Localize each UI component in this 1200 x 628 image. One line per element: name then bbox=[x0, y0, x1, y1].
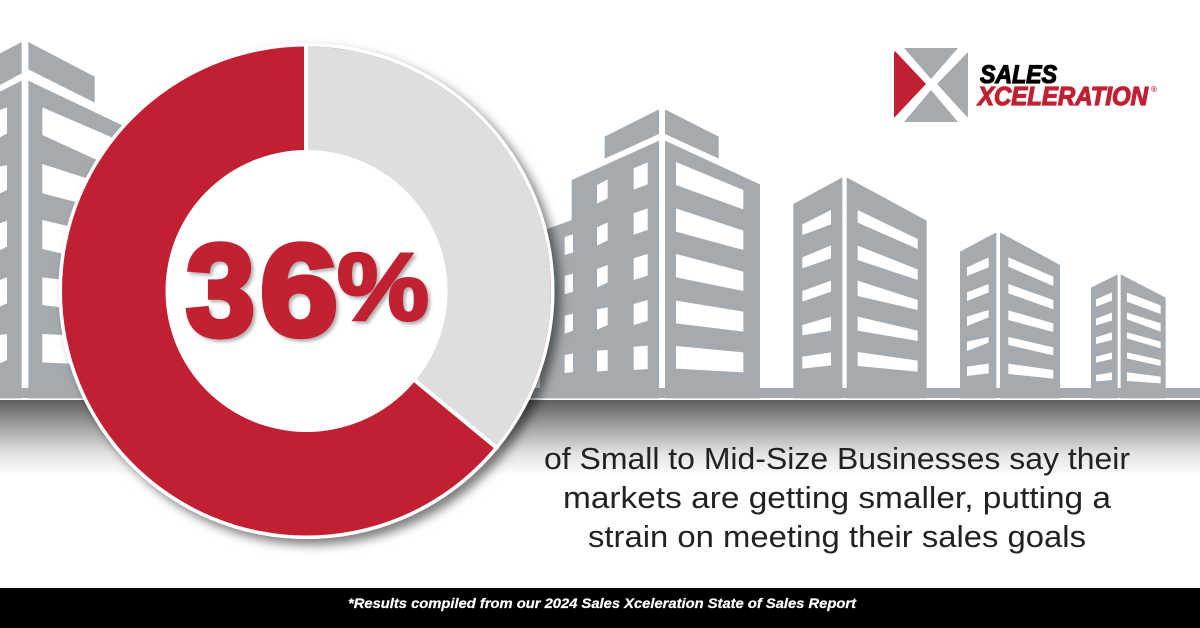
logo: Sales Xceleration: ® bbox=[1151, 85, 1157, 94]
logo: Sales Xceleration bbox=[894, 48, 1157, 122]
building: second tower bbox=[793, 177, 927, 398]
floor gradient band bbox=[0, 400, 1200, 476]
building: large tower bbox=[540, 109, 760, 398]
building: third tower bbox=[960, 232, 1060, 398]
skyline base strip bbox=[0, 388, 1200, 398]
description text bbox=[544, 441, 1130, 554]
building: smallest tower bbox=[1091, 274, 1166, 398]
building: far left tower bbox=[0, 42, 170, 398]
big number: 36%: % bbox=[337, 234, 429, 341]
logo: Sales Xceleration: XCELERATION bbox=[976, 81, 1149, 111]
donut chart: 36 percent bbox=[58, 43, 554, 539]
donut segment: red bbox=[62, 46, 551, 536]
footer bar bbox=[0, 588, 1200, 628]
logo mark bbox=[894, 48, 968, 122]
big number: 36%: 3 bbox=[186, 217, 255, 363]
logo wordmark: SALES bbox=[980, 61, 1057, 89]
description text: of Small to Mid-Size Businesses say their bbox=[544, 441, 1130, 476]
donut hole bbox=[166, 150, 448, 432]
footer source note: *Results compiled from our 2024 Sales Xceleration State of Sales Report bbox=[348, 595, 857, 611]
description text: markets are getting smaller, putting a bbox=[563, 480, 1112, 515]
donut segment: light gray bbox=[306, 46, 551, 447]
donut separators bbox=[306, 44, 498, 449]
donut white rim with shadow bbox=[58, 43, 554, 539]
big number: 36% bbox=[186, 217, 429, 363]
big number: 36%: 6 bbox=[260, 217, 338, 363]
description text: strain on meeting their sales goals bbox=[588, 519, 1086, 554]
